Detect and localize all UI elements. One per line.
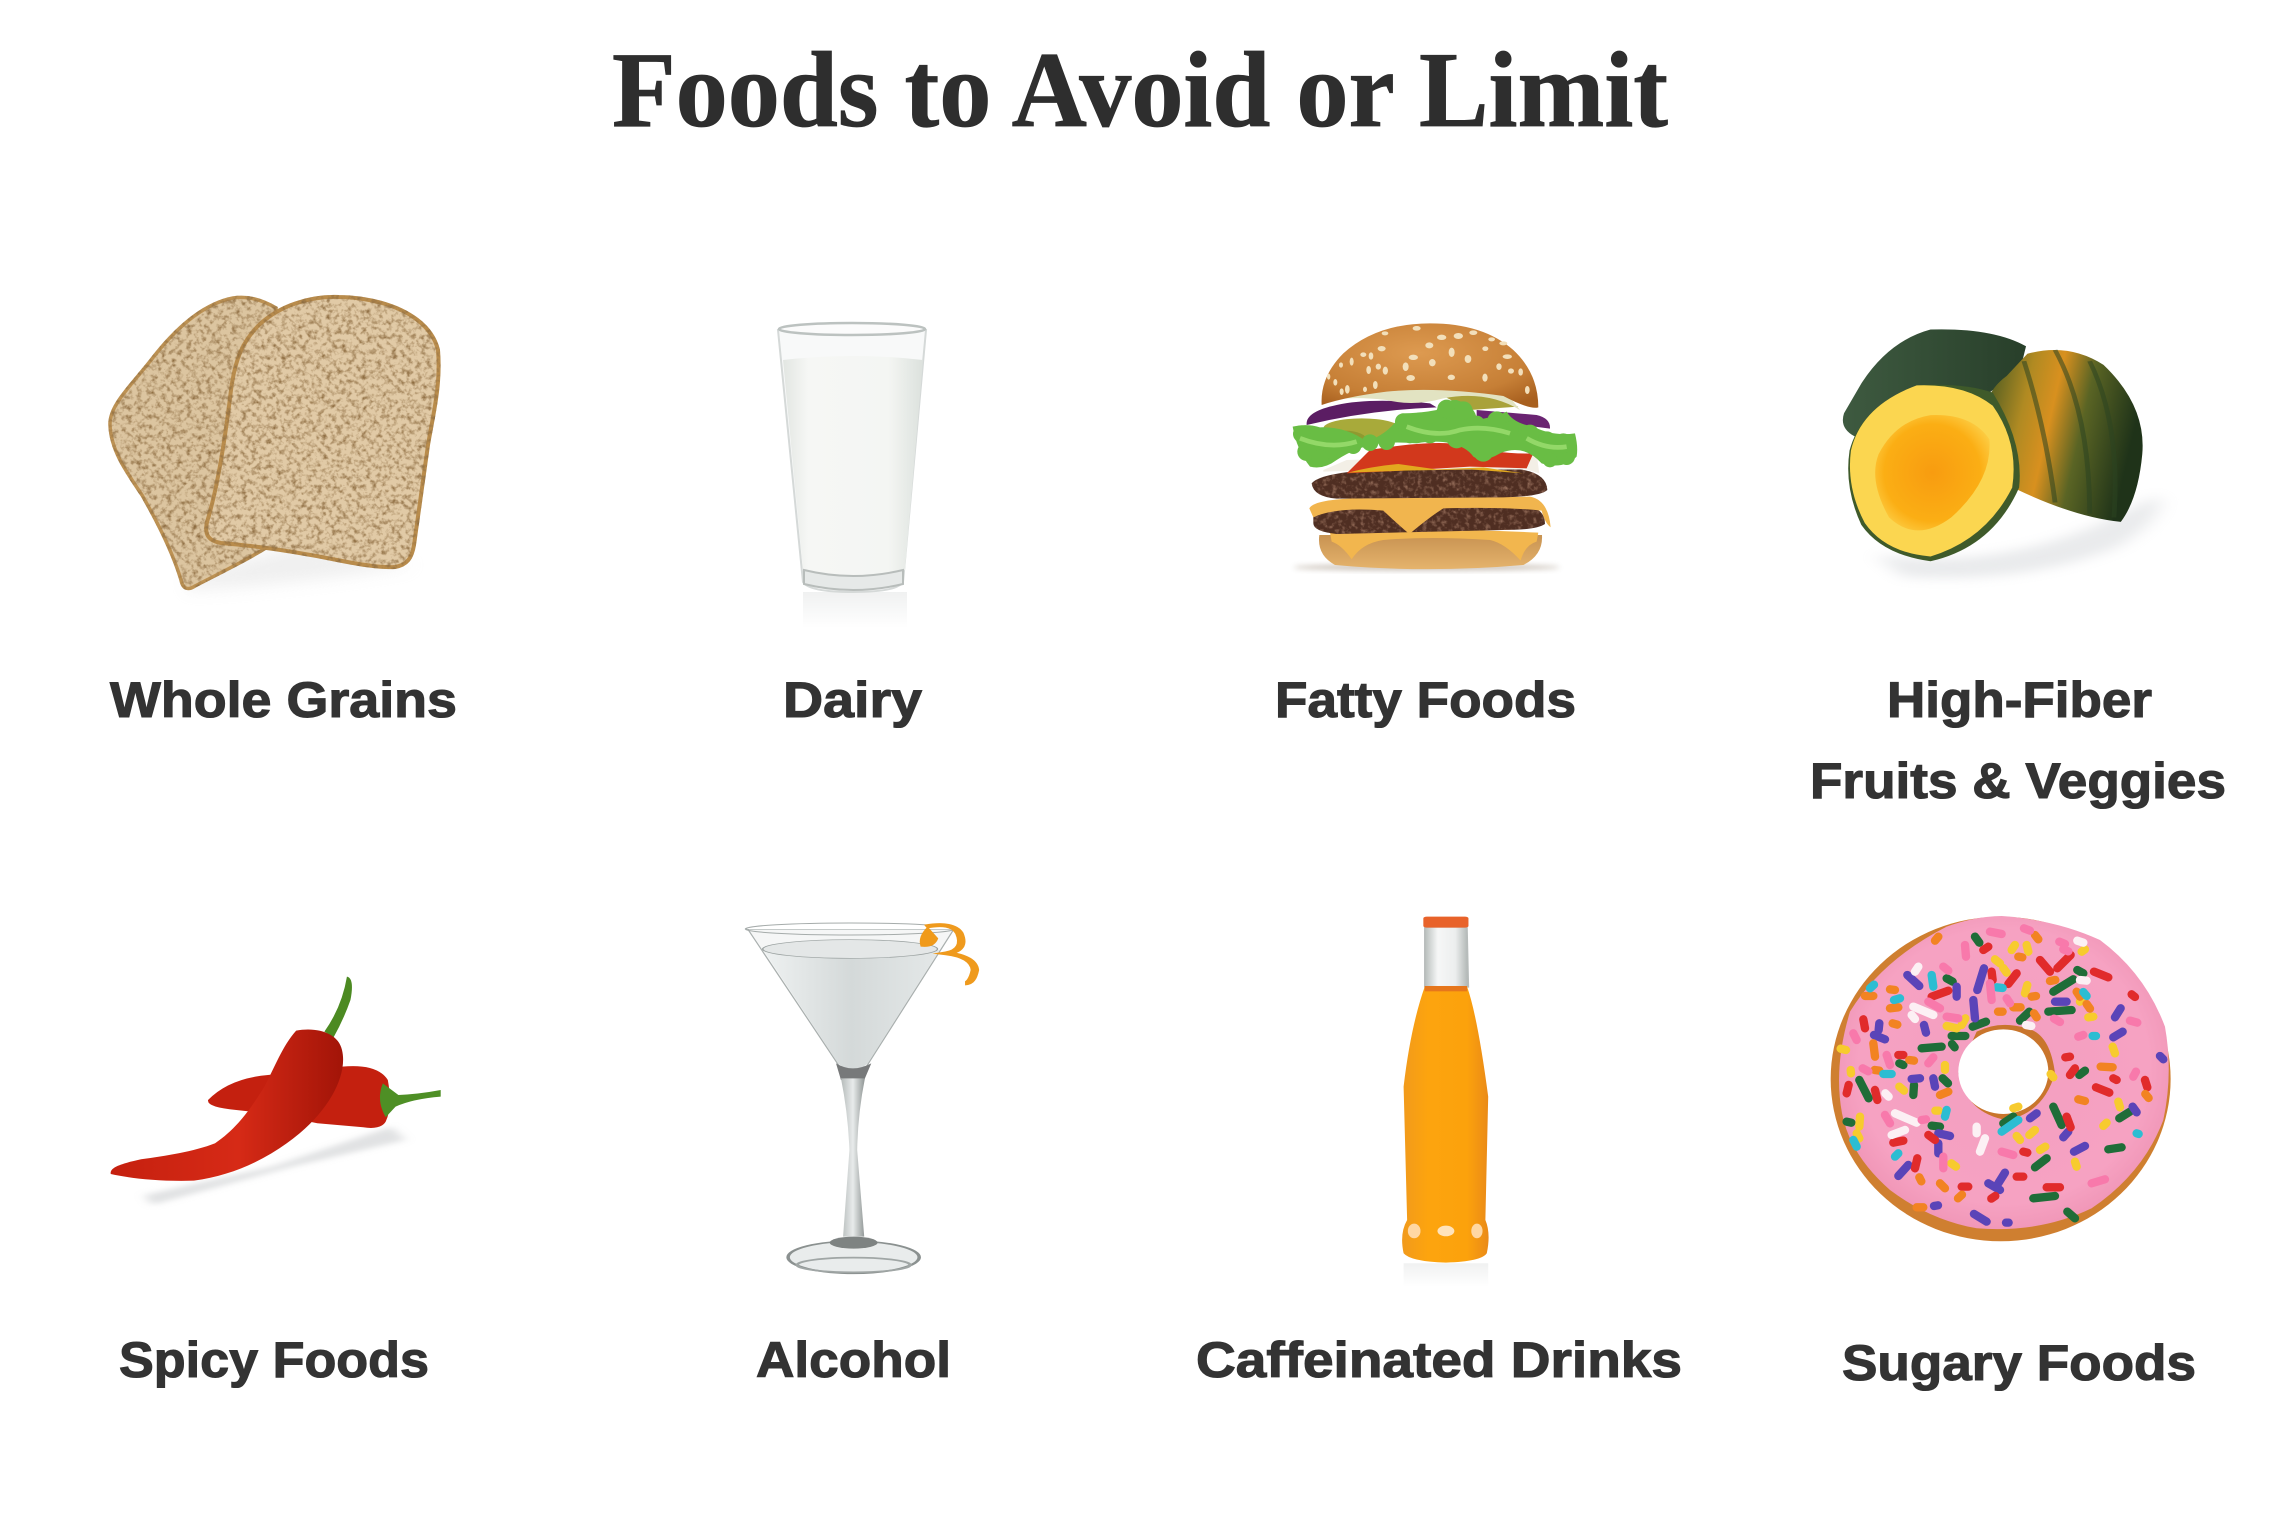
label: sugary foods: Sugary Foods <box>1842 1335 2196 1391</box>
label: fruits and veggies: Fruits & Veggies <box>1810 753 2226 809</box>
icon: pink sprinkled donut <box>1831 916 2171 1241</box>
panel: spicy foods <box>111 977 441 1388</box>
icon: glass of milk <box>778 323 926 628</box>
title: Foods to Avoid or Limit <box>612 31 1668 150</box>
panel: high-fiber fruits and veggies <box>1810 329 2226 809</box>
icon: red chili peppers <box>111 977 441 1205</box>
panel: dairy <box>778 323 926 728</box>
icon: burger <box>1293 323 1577 571</box>
label: alcohol: Alcohol <box>756 1332 951 1388</box>
label: spicy foods: Spicy Foods <box>119 1332 429 1388</box>
label: fatty foods: Fatty Foods <box>1275 672 1576 728</box>
icon: martini glass <box>746 923 975 1273</box>
panel: fatty foods <box>1275 323 1577 728</box>
panel: caffeinated drinks <box>1196 917 1682 1388</box>
icon: bread slices <box>110 297 439 590</box>
icon: orange soda bottle <box>1402 917 1489 1287</box>
panel: sugary foods <box>1831 916 2196 1391</box>
sesame seeds <box>1327 326 1530 395</box>
label: caffeinated drinks: Caffeinated Drinks <box>1196 1332 1682 1388</box>
panel: whole grains <box>110 297 457 728</box>
sprinkles <box>1841 928 2163 1223</box>
panel: alcohol <box>746 923 975 1388</box>
label: whole grains: Whole Grains <box>110 672 457 728</box>
label: high-fiber: High-Fiber <box>1887 672 2152 728</box>
icon: acorn squash <box>1843 329 2160 578</box>
label: dairy: Dairy <box>783 672 922 728</box>
lettuce <box>1293 400 1577 467</box>
